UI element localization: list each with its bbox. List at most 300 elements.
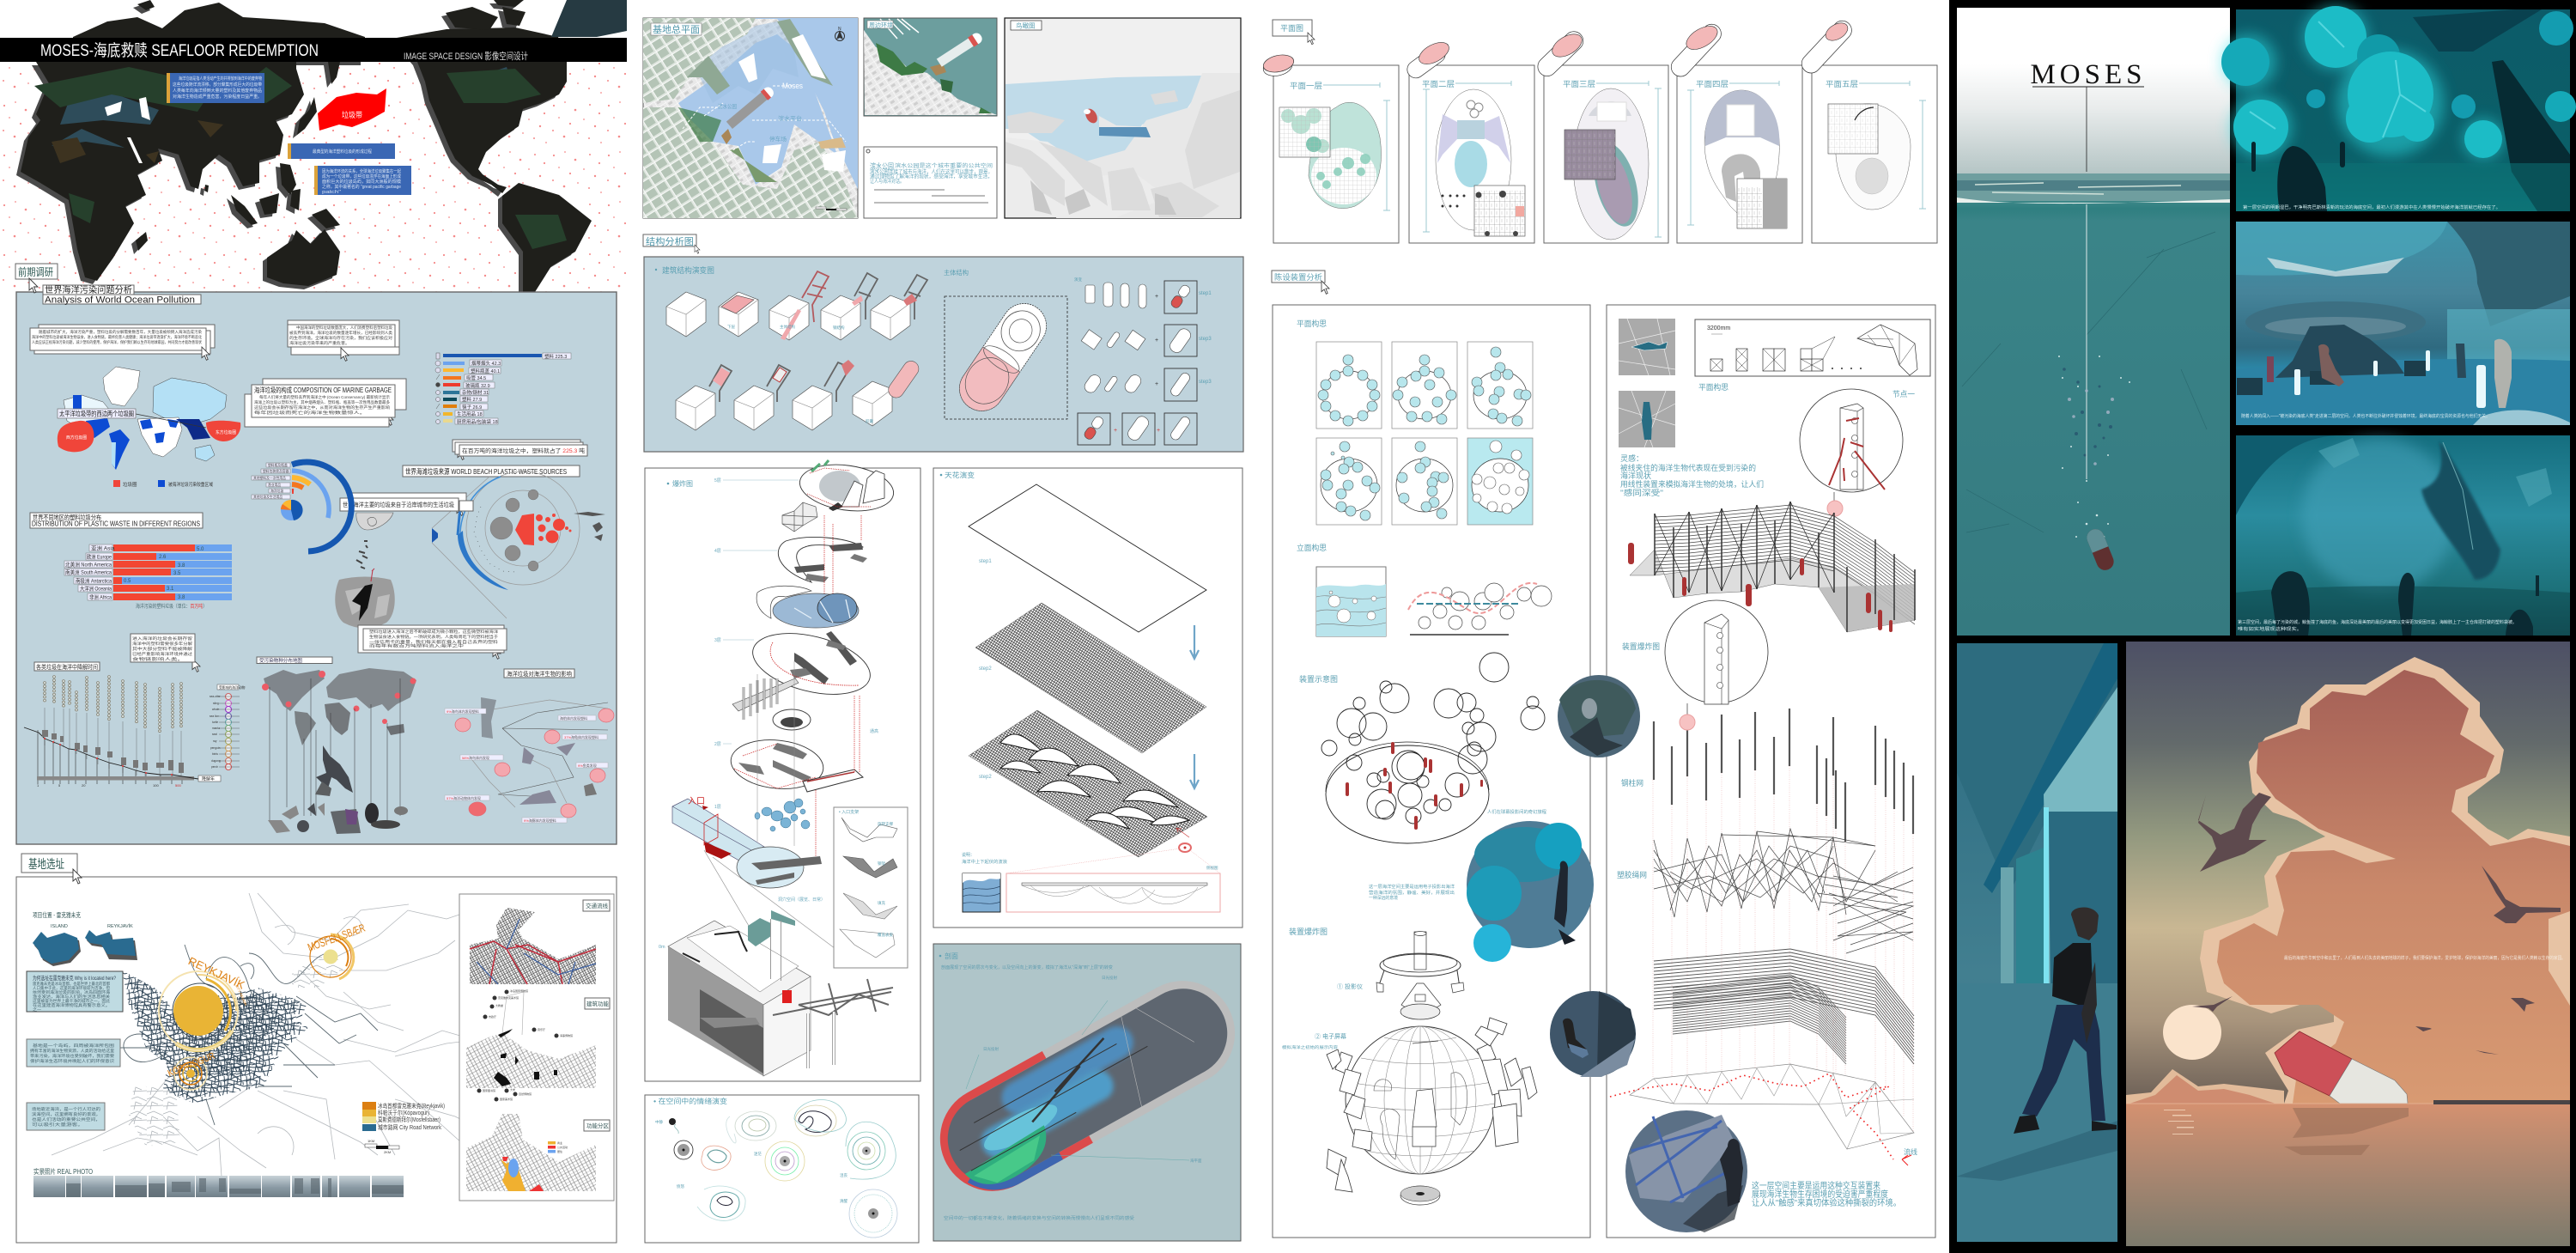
title band: MOSES-海底救赎 SEAFLOOR REDEMPTION [40,41,319,60]
bar list: composition of marine garbage: 塑料 225.3 [544,353,567,360]
text card: degradation: 海洋中的塑料需要很多年分解 [132,641,193,647]
inset: entrance support: 旋转支撑 [878,821,893,827]
text card: beach source intro [340,493,473,511]
red blob: western garbage patch [58,421,94,452]
stacked bar chart: regions: 2.6 [159,555,167,560]
text card: plastic sources: 被丢弃到海洋，海洋垃圾的数量逐年增长，已经影响到人类 [289,330,393,336]
legend: animal species: sting [213,702,219,705]
render: whale hall [2236,435,2570,636]
diagram: impact on marine life: 57%海洋动物体内发现 [447,795,481,800]
step diagrams: step3 [1199,380,1212,385]
note: great pacific garbage patch: 因为海洋环流的关系，全球海洋垃圾聚集在一起 [322,168,401,174]
level labels [659,478,878,950]
legend: animal species: manta [212,727,220,730]
line into sea [2086,204,2087,479]
level labels: 3层 [714,638,721,643]
legend: animal species: birds [212,752,218,756]
note: interaction: 展现海洋生物生存困境的受迫害严重程度 [1752,1189,1888,1200]
heading: section: 剖面 [945,952,958,960]
chart: degradation time chains: 1 [37,783,39,788]
title band [0,38,627,62]
map: traffic flow [470,900,610,984]
heading: plan concept: 平面构思 [1297,319,1327,328]
panel: site plan: N [838,27,841,32]
heading: exploded installation: 装置爆炸图 [1289,927,1327,936]
panel: park description: 滨水公园 [870,161,894,171]
bar list: composition of marine garbage: 塑料瓶盖 40.1 [471,368,500,374]
text box: site note 2: 可以吸引大量游客。 [32,1122,83,1128]
scale bar [365,1139,399,1154]
map: animal distribution [262,668,416,834]
dashed box: capsule [945,295,1067,420]
cursor icon: installation [1321,281,1329,294]
note: garbage patch intro: 人类每年向海洋倾倒大量的塑料及其他废弃物品 [173,88,262,94]
text box: why here: 在这里建造海洋博物馆具有警示意义。 [33,1002,110,1008]
inset: entrance support: 钢架 [878,861,885,867]
leader lines and labels [966,975,1202,1164]
step diagrams: step1 [1199,291,1212,296]
elevation bubbles [1408,583,1552,635]
labels: steps: step2 [979,666,992,672]
text card: composition of marine garbage: 海洋垃圾的构成 COMPOSITION OF MARINE GARBAGE [254,386,392,394]
text card: garbage intro [30,325,215,354]
heading: distribution of plastic waste: 世界不同地区的塑料垃圾分布 [33,513,101,521]
projector assembly [1337,931,1464,1019]
note: wave: 说明： [962,852,975,858]
section label: floor plans [1273,20,1312,36]
heading: ceiling: 天花演变 [945,471,975,479]
map: building functions: 建筑功能 [586,1000,610,1007]
cursor icon: floor plans [1308,33,1315,45]
dotted guide lines [1653,766,1913,1147]
heading: world beach plastic waste sources [403,465,580,477]
detail circle: node 2 [1665,600,1768,726]
render: seated woman circle [1550,991,1636,1077]
text card: beach source intro: 世界海洋主要的垃圾来自于沿岸城市的生活垃圾 [343,501,454,508]
panel: bubble installation [1273,305,1590,1238]
note: great pacific garbage patch: 之称，其中最著名的 "great pacific garbage [322,184,401,190]
heading: exploded: 爆炸图 [672,479,693,488]
note: interaction: 这一层空间主要是运用这种交互装置来 [1752,1180,1880,1191]
section label: installation analysis: 陈设装置分析 [1274,272,1322,282]
text card: plastic pollution fact: 生物误食进入食物链。一项研究表明，人类每周吃下的塑料相当于 [369,634,499,640]
floor 5 [797,459,896,516]
emotion contours: 迷茫 [754,1151,762,1157]
heading: impact on marine life [504,669,574,678]
pink capsule tower [885,358,921,401]
step diagrams: step3 [1199,337,1212,342]
emotion contours: 中静 [655,1119,663,1125]
figure: man walking [2014,907,2117,1134]
render: garbage hall: 随着人类的闯入——"被污染的海底人类"走进第二层的空间，人类也不断往外破坏并侵蚀着环境，最终海底的宝贵的资源也与他们无关。 [2241,413,2490,419]
blue bubbles [755,799,810,831]
render: whale hall: 唯有如实地展现这种现实。 [2238,626,2302,632]
stacked bar chart: regions: 3.1 [167,587,174,592]
legend: site: 城市路网 City Road Network [378,1123,441,1131]
detail circle: node 1 [1800,389,1903,516]
marker: Mosfellsbaer [306,922,367,979]
labels: steps: step1 [979,559,992,564]
truss [782,502,817,532]
legend: garbage map: 垃圾圈 [123,481,137,488]
building on site plan [726,85,775,130]
maps: Iceland and Reykjavik: ISLAND [51,924,68,929]
heading: impact on marine life: 海洋垃圾对海洋生物的影响 [507,670,572,678]
bar list: composition of marine garbage: 塑料 27.9 [462,396,482,403]
scale bar: 1KM [368,1139,374,1143]
marker: Kopavogur [166,1050,216,1090]
heading: section [939,952,958,960]
heading: degradation time: 各类垃圾在海洋中降解时间 [36,663,98,671]
level labels: 5层 [714,478,721,484]
text box: why here: 之一 [33,1007,41,1013]
panel: exploded axonometric: 洞穴空间（展览、日常） [778,897,825,903]
heading: world beach plastic waste sources: 世界海滩垃圾来源 WORLD BEACH PLASTIC WASTE SOURCES [405,467,567,476]
text card: degradation: 其中大部分塑料不能被降解 [132,646,193,652]
stacked bar chart: regions: 非洲 Africa [89,593,112,601]
step diagrams: + [1155,338,1158,344]
bowl [773,709,811,730]
half donut chart: 其他垃圾及生活用品 [253,495,283,499]
label: plastic strings: 塑胶绳网 [1617,870,1647,879]
photo strip: real photos [33,1167,404,1197]
render: walking man [1957,643,2117,1242]
step diagrams: 演变 [1074,277,1082,283]
heading: main structure: 主体结构 [944,268,969,277]
radial chart: beach waste sources [432,471,605,618]
legend: garbage map [113,480,213,488]
cloud inner [2217,670,2570,1104]
leader lines and labels: 海平面 [1190,1158,1202,1164]
text card: plastic sources: 的生存环境。全球海洋均存在污染，我们应该积极应对 [289,335,393,341]
steel columns [1654,709,1913,842]
note: garbage patch intro: 对海洋生物造成严重危害，污染程度日益严重。 [173,94,262,100]
note: pacific garbage [288,143,395,159]
panel: park description: 滨水公园是这个城市重要的公共空间 [895,162,993,169]
sinking particles [2058,356,2130,538]
map: building functions: 雷克雅未克美术馆 [498,995,519,1000]
inspiration images [1619,319,1675,447]
stacked bar chart: regions: 欧洲 Europe [87,553,112,560]
stacked bar chart: regions: 3.8 [178,595,185,600]
map: building functions: 大学 [510,1087,515,1092]
plastic string web [1654,829,1913,953]
map: functional zones: 商业 [557,1140,562,1145]
heading: elevation concept: 立面构思 [1297,543,1327,552]
scale bar: 2KM [384,1150,391,1154]
panel: exploded axonometric [645,459,920,1081]
ring detail marker: 侧视图 [1206,865,1218,871]
icon: pill level 3 [1534,27,1587,80]
chart: degradation time chains: 20 [82,783,86,788]
maps: Iceland and Reykjavik: REYKJAVÍK [107,923,133,929]
panel: park description [864,147,997,218]
marker: Reykjavik [159,954,248,1050]
heading: affected animals distribution [257,657,332,664]
cursor icons [192,347,501,672]
panel: floor 3 plan [1544,65,1668,243]
chart: degradation time chains [24,677,221,788]
sun [2163,1005,2221,1060]
render: water projection circle [1467,821,1594,962]
diagram: impact on marine life: 9%鱼类发现 [578,763,597,768]
floor 3 [746,623,877,705]
sphere screen [1282,1018,1537,1192]
leader lines and labels: 日光投射 [983,1046,999,1052]
note: section bottom: 空间中的一切都在不断变化，随着情绪的变换与空间的转换而慢慢向人们呈现不同的感受 [944,1215,1134,1221]
legend: animal species: penguin [210,746,221,750]
panel: ceiling evolution [933,468,1242,928]
ceiling step 2 [975,603,1206,753]
render: jellyfish hall: 第一层空间的明朗湿巴，干净明亮巴斯林清新的玩法的海底空间，最初人们漫游其中在人类慢慢开始破坏海洋前就已经存在了。 [2243,204,2500,210]
step diagrams [1074,277,1212,445]
inset: entrance support: 填充 [878,900,885,906]
inspiration text: 灵感： [1620,453,1643,463]
panel: floor 2 plan: 平面二层 [1422,80,1455,88]
panel: site plan: 停车场 [769,135,787,143]
text box: why here: 人口集中于此，这里的海洋环境较为洁净，但 [33,985,110,991]
floor 1 [737,847,822,888]
diagram: impact on marine life: 海豹体内发现塑料 [560,715,587,721]
inset: entrance support: • 入口支架 [839,809,859,815]
sea surface [1957,173,2230,204]
text card: garbage intro: 海洋中的塑料垃圾被海洋生物误食，进入食物链，最终危害人类健康；海洋垃圾带逐渐扩大，海洋环境不断恶化 [32,334,202,340]
map: functional zones: 公共活动 [557,1145,568,1149]
map: traffic flow: 交通流线 [586,902,608,909]
text card: composition of marine garbage: 这些垃圾会长期存留在海洋之中，从而对海洋生物的生存产生严重影响 [254,404,391,411]
elevation wave box [1316,567,1386,636]
level labels: 1层 [714,805,721,810]
stacked bar chart: regions: 海洋污染的塑料垃圾（单位：百万吨） [136,603,207,610]
heading: node: 节点一 [1893,390,1915,398]
level labels: 通高 [870,728,878,734]
sphere screen: 模拟海洋之初始的展示内容 [1282,1044,1339,1050]
section label: site selection [21,854,77,873]
note: projection: 一种深远的意境 [1369,895,1398,901]
half donut chart [252,462,351,551]
note: garbage patch intro: 这些垃圾随洋流漂移，部分聚集形成巨大的垃圾带 [173,82,262,88]
bubble installation on disk [1321,653,1545,843]
render: sunset scene [2126,642,2570,1246]
legend: site: 冰岛首都雷克雅未克(Reykjavik) [378,1102,445,1110]
entrance beam [672,797,764,867]
note: interaction: 让人从"触感"来真切体验这种撕裂的环境。 [1752,1197,1901,1208]
strip walls [1654,949,1914,1064]
legend: animal species: 受影响的海洋动物 [219,685,246,690]
heading: installation exploded: 装置爆炸图 [1622,642,1660,651]
caption: bubble world: 人们在球幕投影间的奇幻旅程 [1487,809,1546,815]
arrows: ceiling evolution [1190,625,1199,788]
section label: site selection: 基地选址 [28,857,64,871]
projector assembly: ① 投影仪 [1337,982,1363,990]
stacked bar chart: regions [64,544,232,610]
title band: IMAGE SPACE DESIGN 影像空间设计 [404,50,528,62]
chart: degradation time chains: 5 [58,783,61,788]
towers and capsule steps [709,271,927,402]
panel: aerial view: 鸟瞰图 [1016,21,1036,29]
step diagrams: + [1155,294,1158,300]
text card: degradation: 食物链影响人类。 [132,656,184,662]
bar list: composition of marine garbage: 筷子 26.9 [462,404,482,411]
panel: park description: 让人与海洋对话。 [870,178,904,185]
columns and walkway [732,678,799,720]
text box: why here: 为何选址在雷克雅未克 Why is it located here? [33,974,116,982]
diagram: impact on marine life: 58%海鸟体内发现 [462,755,489,760]
level labels: 0m [659,945,665,950]
half donut chart: 海洋垃圾 [270,489,283,493]
bar list: composition of marine garbage: 厨房用品/包装袋 18 [457,418,498,425]
note: wave [962,852,1007,865]
map: building functions [466,988,610,1101]
panel: floor 5 plan [1812,65,1937,243]
legend: animal species: seal [212,733,217,736]
panel: emotion evolution [645,1095,919,1243]
floor 4 [778,538,867,582]
note: great pacific garbage patch [314,166,411,195]
note: great pacific garbage patch: 面积巨大的垃圾岛屿，如同大洲般的规模 [322,179,401,185]
marker: Reykjavik: CITY REGION [234,984,248,1007]
panel: floor 1 plan: 平面一层 [1290,82,1322,90]
legend: site: 科帕沃于尔(Kópavogur) [378,1109,429,1116]
chart: degradation time chains: 降解年 [202,776,215,782]
text box: why here: 这里被誉为世界上最干净的城市之一，因此 [33,998,110,1004]
cursor icons: site section [73,869,82,884]
inset: entrance support: 覆盖表皮 [878,932,893,938]
maps: Iceland and Reykjavik [33,923,137,966]
panel: context maps [459,894,614,1201]
capsule pill [2275,1031,2408,1104]
world map background with ocean plastic dots [0,0,627,295]
floor grid with visitor path [1610,1064,1917,1165]
text box: site note 2: 滨海空间，这里拥有良好的景观， [32,1111,100,1117]
text card: plastic sources: 中国海洋的塑料垃圾数量庞大，人们消费塑料后塑料垃圾 [296,325,392,331]
render: dark seating circle [1558,675,1640,757]
stacked bar chart: regions: 北美洲 North America [65,560,112,569]
heading: distribution of plastic waste [30,513,203,528]
panel: park plan [864,18,997,116]
section label: floor plans: 平面图 [1280,24,1303,33]
legend: animal species: turtle [212,721,218,724]
text card: composition of marine garbage [245,379,406,427]
inspiration text: 用线性装置来模拟海洋生物的处境，让人们 [1620,479,1764,489]
diagram: impact on marine life: 9%海鸟体内发现塑料 [447,709,479,714]
concrete block [668,910,811,1076]
legend: animal species: ray [213,739,217,743]
icon: pill level 1 [1261,52,1296,78]
legend: animal species: sea lion [210,715,219,718]
map: pacific garbage patches world map: 西方垃圾圈 [66,435,87,441]
inset: entrance support [834,807,908,968]
label: steel mesh: 钢柱网 [1621,778,1643,788]
stacked bar chart: regions: 3.8 [178,563,185,569]
stacked bar chart: regions: 南美洲 South America [65,569,112,575]
heading: pollution analysis: Analysis of World Ocean Pollution [45,295,195,306]
stacked bar chart: regions: 南极洲 Antarctica [76,577,112,584]
caption on sunset: 最后的海底升华到空中和云里了，人们看到人们失去的美丽地球的样子，我们要保护海洋，爱护地球，保护好海洋的美丽，因为它是我们人类赖以生存的家园。 [2284,955,2566,961]
text box: site note 2: 场地靠近海湾，是一个行人可达的 [32,1106,100,1112]
heading: affected animals distribution: 受污染物种分布地图 [259,657,302,664]
panel: emotion evolution: • 在空间中的情绪演变 [653,1097,727,1105]
note: section top: 剖面展现了空间的层次与变化，以及空间向上的渐变，模拟了海洋从"深海"到"上层"的转变 [941,964,1113,970]
panel: park description: 通过博物馆了解海洋的现状，感受海洋，享受城市生活， [870,173,993,180]
legend: site [362,1102,445,1131]
section label: research: 前期调研 [18,265,53,278]
red garbage patch [318,88,386,131]
map: building functions: 大教堂 [495,1003,503,1007]
panel: floor 4 plan [1677,65,1802,243]
legend: animal species: whale [212,708,220,711]
note: pacific garbage: 最典型的海洋塑料垃圾的形成过程 [313,149,372,155]
half donut chart: 其他塑料及一次性用品 [253,476,286,480]
black gallery background [1949,0,2576,1253]
marker: Mosfellsbaer: MOSFELLSBÆR [306,922,367,954]
heading: pollution analysis: 世界海洋污染问题分析 [45,284,132,295]
isometric boxes: evolution steps [666,292,910,430]
floor grid with visitor path: 流线 [1904,1147,1917,1156]
text box: site note 2 [27,1103,105,1130]
entrance beam: 入口 [688,797,705,806]
panel: site plan: Moses [782,82,803,90]
text box: site note 1 [27,1039,120,1067]
text card: plastic pollution fact: 而每年有数百万吨塑料流入海洋之中 [369,642,465,649]
mesh installation [1628,502,1915,632]
heading: structure evolution: 建筑结构演变图 [662,265,714,275]
text box: why here: 雷克雅未克是冰岛首都，也是世界上最北的首都 [33,981,110,987]
cloud right rim [2549,911,2570,1006]
icon: pill level 2 [1404,38,1452,82]
module diagram: 3200mm [1707,325,1730,331]
panel: structure analysis: 下层 [727,325,735,330]
text box: site note 1: 保护海洋生态环境并唤起人们的环保意识 [30,1058,114,1064]
cloud outer [2200,657,2570,1104]
panel: structure analysis: 主体结构 [780,324,795,330]
diagram: impact on marine life: 37%海龟体内发现塑料 [564,734,598,739]
poster: MOSES [1957,8,2230,636]
text card: amount of plastic [453,440,587,456]
text card: amount of plastic: 在百万吨的海洋垃圾之中，塑料就占了 225.3 吨 [462,447,586,454]
note: garbage patch intro [167,73,264,103]
red blob: eastern garbage patch [206,421,240,441]
map: pacific garbage patches world map: 东方垃圾圈 [216,429,236,435]
water floor [756,586,859,628]
render: person in string web [1625,1110,1747,1232]
text box: site note 2: 也是人们活动的重要公共空间， [32,1116,100,1122]
text card: plastic pollution fact [358,625,507,653]
half donut chart: 渔业用品 [268,483,281,487]
stacked bar chart: regions: 5.0 [197,547,204,552]
legend: animal species [210,684,246,769]
note: projection: 营造海洋的氛围，静谧、美好，并展现出 [1369,890,1455,896]
text card: composition of marine garbage: 海滩上的垃圾以塑料为主，其中烟蒂烟头、塑料瓶、瓶盖等一次性用品数量最多 [254,399,390,405]
label: garbage patch: 垃圾带 [342,110,362,119]
bar list: composition of marine garbage: 烟蒂烟头 42.3 [471,360,501,367]
panel: string installation [1607,305,1935,1238]
half donut chart: 塑料包装袋及容器 [263,469,289,473]
text card: plastic pollution fact: 一张信用卡的重量，我们每天都在摄入着自己丢弃的塑料 [369,639,499,645]
bar list: composition of marine garbage: 玻璃瓶 32.9 [465,382,490,389]
text card: garbage intro: 人类应该正视海洋污染问题，减少塑料的使用，保护海洋，保护我们赖以生存的地球家园，共同努力才能改善现状 [32,339,202,345]
emotion contours: 沮丧 [840,1172,848,1178]
panel: structure analysis: 钢结构 [833,325,845,331]
stacked bar chart: regions: 3.5 [173,571,181,576]
stacked bar chart: regions: 亚洲 Asia [91,544,115,551]
legend: animal species: sea-otter [210,695,222,698]
step diagrams: + [1157,428,1160,434]
panel: floor 4 plan: 平面四层 [1696,80,1728,88]
birds [2192,793,2561,1055]
emotion contours [655,1100,897,1238]
reflections [2284,1108,2409,1155]
